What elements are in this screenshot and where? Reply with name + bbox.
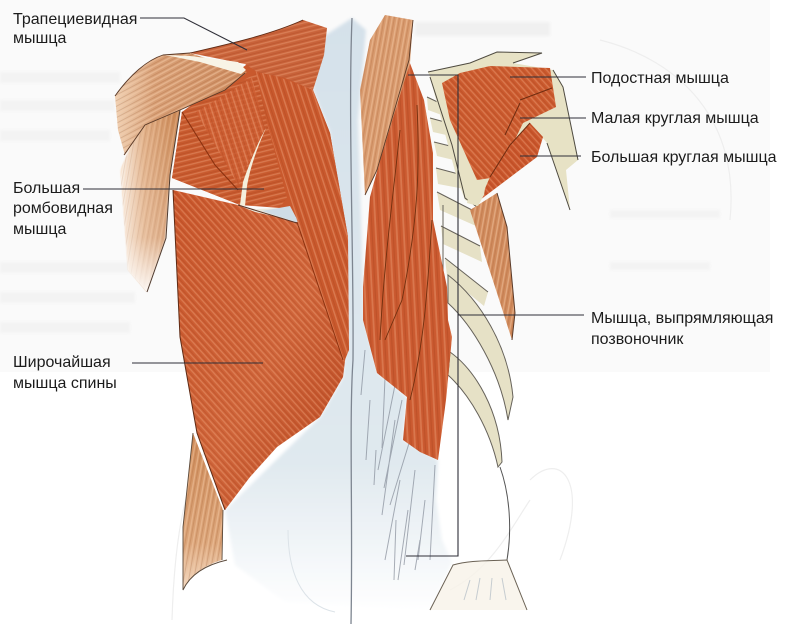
spine of scapula: [165, 55, 246, 74]
bones: ribs: [427, 97, 513, 467]
label: erector spinae: Мышца, выпрямляющая: [591, 310, 773, 327]
muscle: erector spinae: [363, 58, 452, 460]
label: rhomboid major: ромбовидная: [13, 200, 113, 217]
label: latissimus dorsi: Широчайшая: [13, 354, 111, 371]
label: trapezius: Трапециевидная: [13, 11, 137, 28]
label: trapezius: мышца: [13, 30, 66, 47]
muscle: infraspinatus: [442, 66, 556, 180]
bone: scapula: [428, 52, 578, 210]
panel: left figure muscles: [115, 20, 349, 590]
muscle underlay: [172, 62, 348, 300]
scapula lower angle: [467, 182, 486, 206]
muscle: lower trapezius band: [255, 68, 349, 362]
spine midline: [351, 18, 353, 624]
muscle: tan lower lat: [470, 193, 515, 340]
muscle: latissimus lower tan: [183, 433, 227, 590]
flank outline: [500, 467, 510, 560]
label: infraspinatus: Подостная мышца: [591, 70, 729, 87]
muscle: trapezius: [190, 20, 327, 90]
muscle: latissimus tan (right): [360, 15, 413, 195]
muscle: latissimus dorsi: [173, 190, 347, 510]
label: teres major: Большая круглая мышца: [591, 149, 777, 166]
leader lines: [83, 18, 586, 556]
label: rhomboid major: Большая: [13, 180, 80, 197]
muscle: rhomboid major: [172, 73, 287, 207]
label: teres minor: Малая круглая мышца: [591, 110, 759, 127]
muscle: teres major: [480, 123, 543, 200]
muscle: deltoid: [115, 53, 247, 155]
bone: pelvis: [430, 560, 527, 610]
label: erector spinae: позвоночник: [591, 331, 684, 348]
label: rhomboid major: мышца: [13, 221, 66, 238]
label: latissimus dorsi: мышца спины: [13, 375, 117, 392]
tendon strip: [240, 128, 266, 206]
back fascia (pale blue): [225, 18, 452, 612]
muscle: upper arm: [120, 110, 180, 292]
panel: right figure muscles: [360, 15, 578, 610]
